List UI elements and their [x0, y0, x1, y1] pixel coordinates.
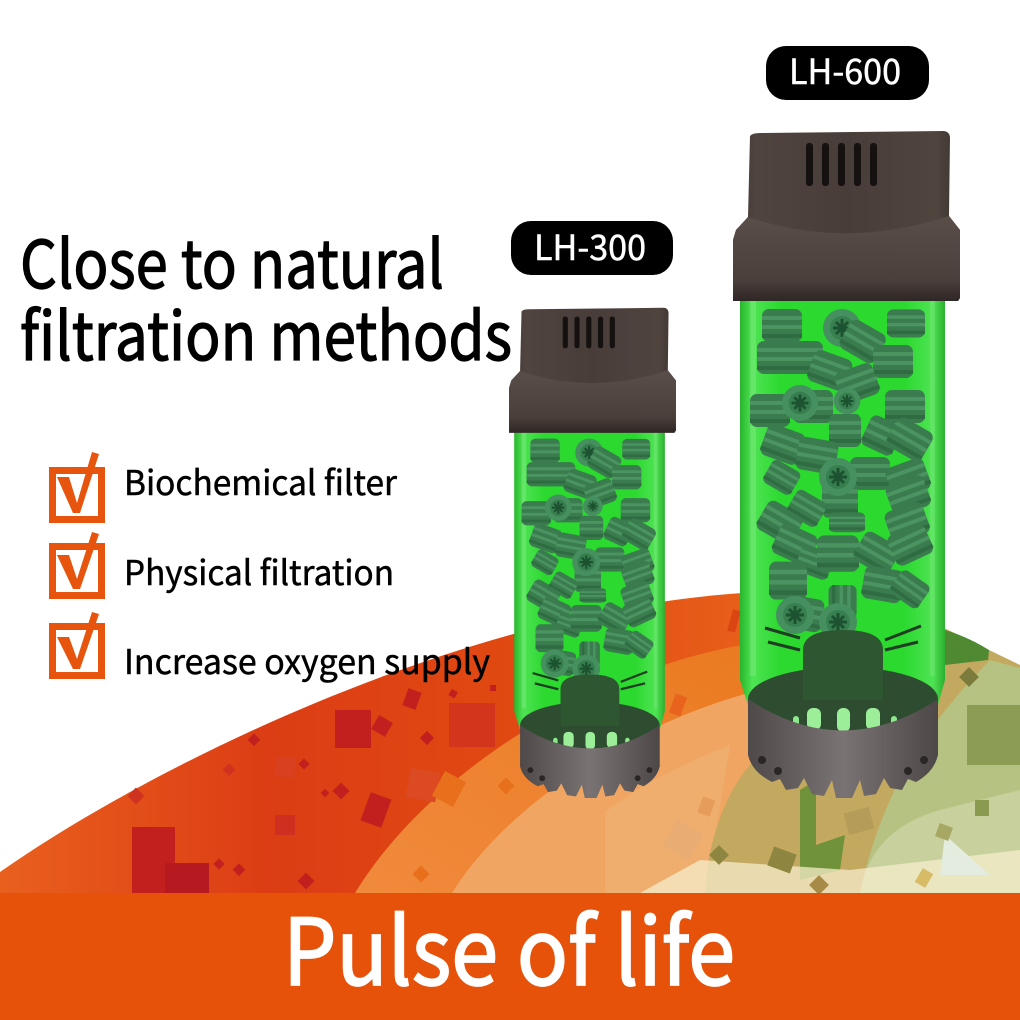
- feature: Biochemical filter: [49, 452, 398, 523]
- label: LH-600: [766, 44, 929, 100]
- feature: Physical filtration: Physical filtration: [124, 546, 394, 595]
- arc: olive and green area: [706, 625, 1020, 893]
- label: LH-300: LH-300: [534, 220, 646, 271]
- arc: light orange band: [452, 690, 760, 893]
- background: coloured arcs: [0, 592, 1020, 895]
- label: LH-300: [511, 220, 673, 275]
- icon: orange checkbox: [49, 452, 105, 523]
- icon: orange checkbox: [49, 612, 105, 679]
- heading: Close to natural filtration methods: Close to natural: [20, 212, 444, 308]
- filter: LH-600: [733, 131, 960, 798]
- label: LH-600: LH-600: [789, 44, 901, 95]
- filter: LH-300: [509, 308, 676, 798]
- feature: Physical filtration: [49, 532, 394, 599]
- footer banner: Pulse of life: Pulse of life: [283, 879, 735, 1012]
- feature: Biochemical filter: Biochemical filter: [124, 456, 398, 505]
- icon: orange checkbox: [49, 532, 105, 599]
- heading: Close to natural filtration methods: filtration methods: [20, 284, 512, 380]
- heading: Close to natural filtration methods: [20, 212, 512, 380]
- arc: red band: [0, 592, 760, 893]
- feature: Increase oxygen supply: [49, 612, 490, 684]
- footer banner: Pulse of life: [0, 879, 1020, 1020]
- arc: orange band: [355, 642, 760, 893]
- feature: Increase oxygen supply: Increase oxygen supply: [124, 635, 490, 684]
- scattered squares: [128, 685, 496, 893]
